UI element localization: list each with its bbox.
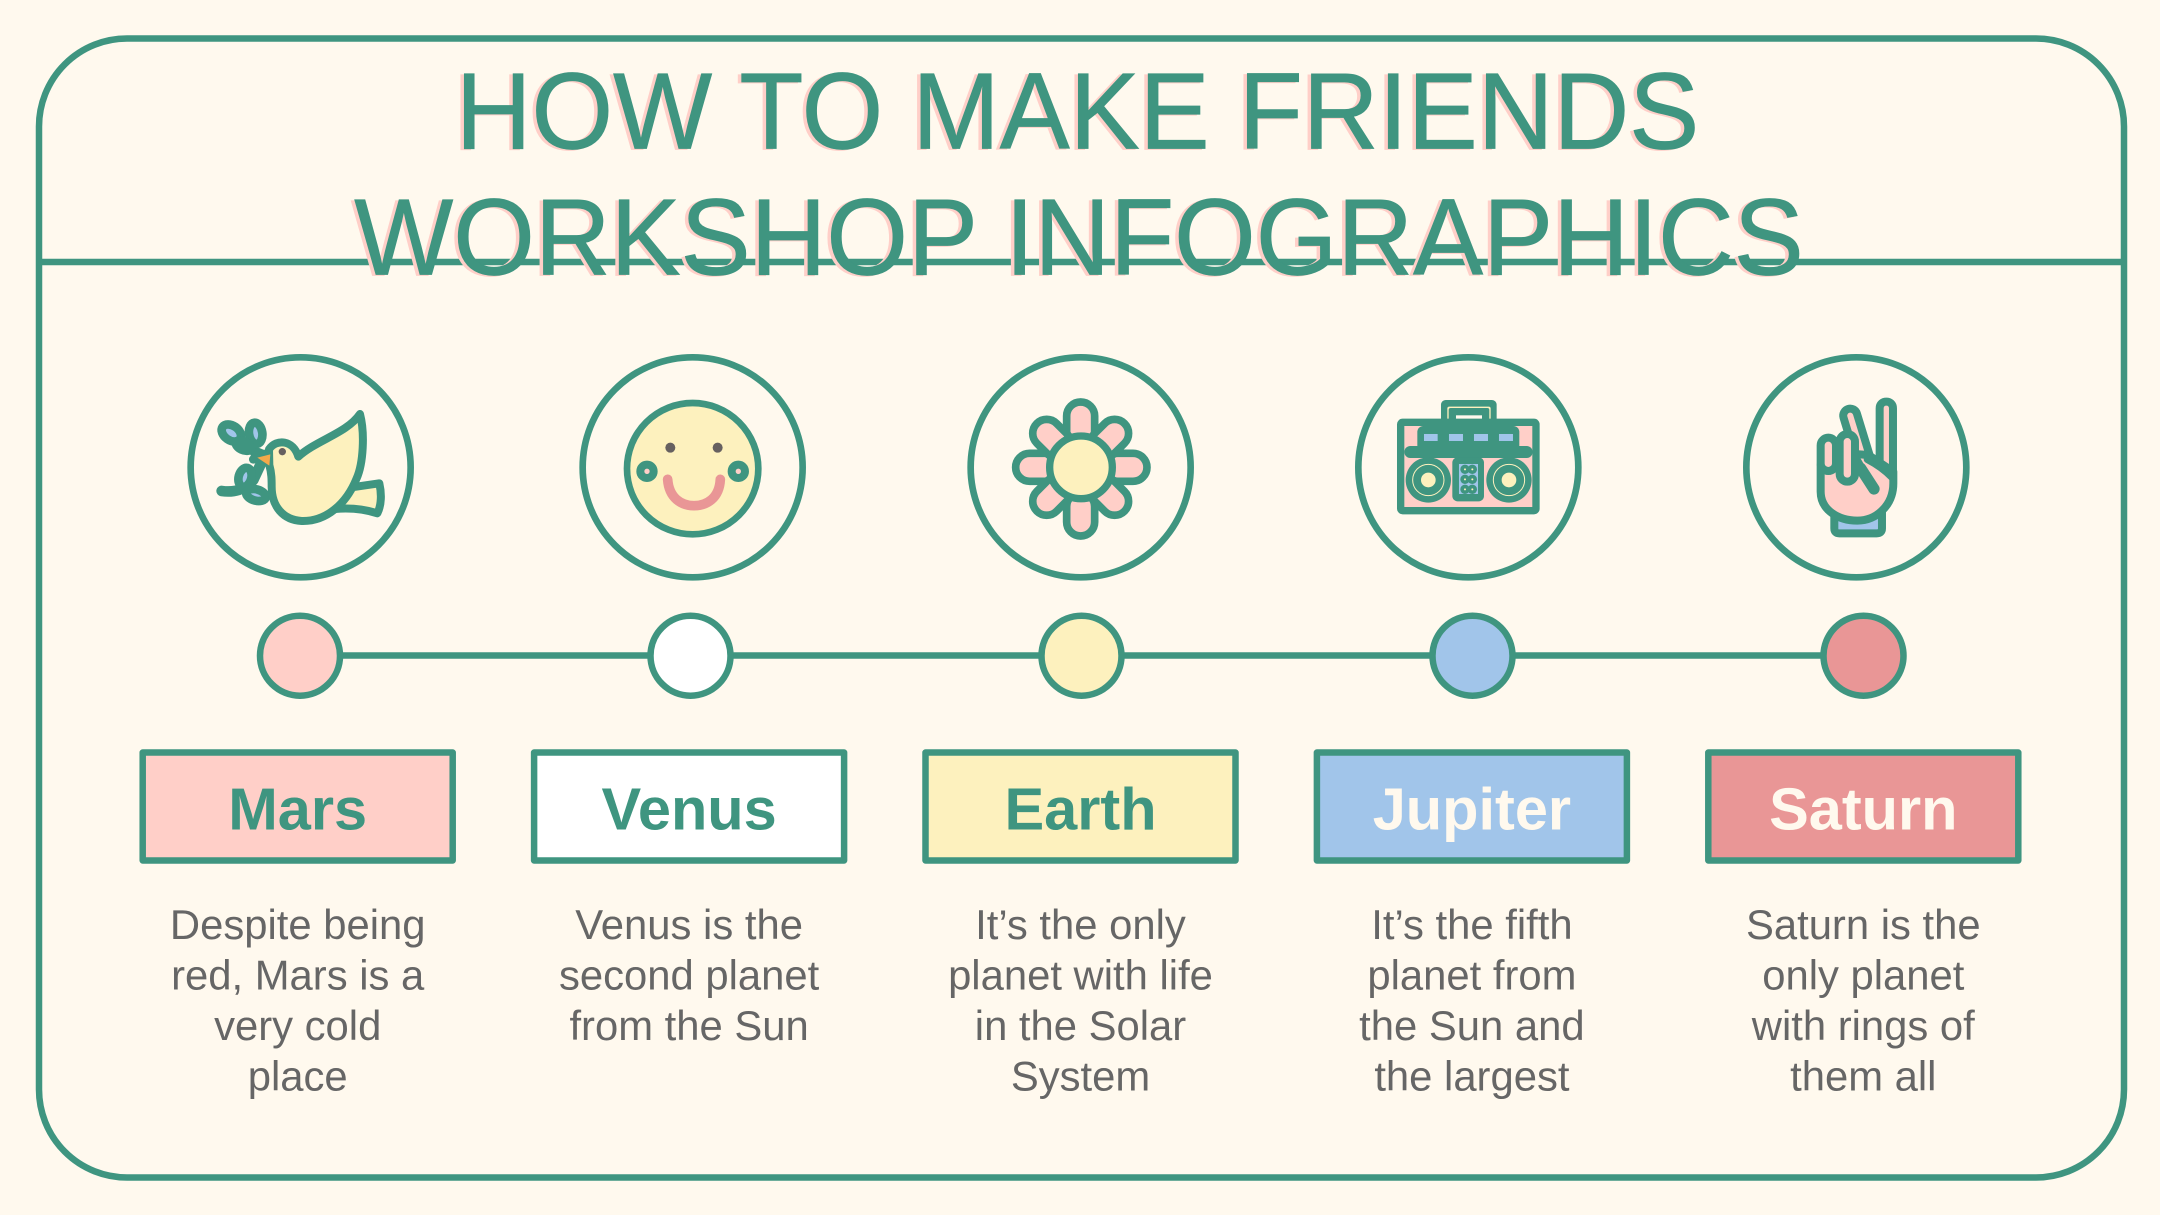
icon: smiling face bbox=[583, 357, 803, 577]
title: WORKSHOP INFOGRAPHICS bbox=[354, 176, 1804, 298]
header divider bbox=[39, 259, 2124, 265]
label: Earth: Earth bbox=[1004, 776, 1157, 842]
description: Mars: very cold bbox=[214, 1002, 381, 1049]
description: Saturn: them all bbox=[1790, 1052, 1936, 1100]
timeline node: Venus bbox=[650, 616, 730, 696]
description: Venus: from the Sun bbox=[569, 1002, 809, 1049]
title: WORKSHOP INFOGRAPHICS bbox=[351, 177, 1800, 299]
description: Venus: second planet bbox=[559, 952, 820, 998]
label: Venus bbox=[534, 752, 844, 860]
label: Saturn: Saturn bbox=[1769, 776, 1958, 842]
description: Earth: in the Solar bbox=[975, 1002, 1186, 1049]
label: Mars: Mars bbox=[228, 776, 367, 842]
description: Earth: planet with life bbox=[948, 952, 1213, 998]
title: HOW TO MAKE FRIENDS bbox=[452, 51, 1696, 173]
description: Venus: Venus is the bbox=[575, 901, 803, 948]
label: Earth bbox=[926, 752, 1236, 860]
description: Jupiter: the Sun and bbox=[1359, 1002, 1585, 1049]
timeline node: Earth bbox=[1042, 616, 1122, 696]
label: Venus: Venus bbox=[601, 776, 777, 842]
timeline node: Saturn bbox=[1824, 616, 1904, 696]
description: Jupiter: It’s the fifth bbox=[1371, 901, 1573, 948]
description: Mars: Despite being bbox=[170, 901, 426, 948]
description: Mars: red, Mars is a bbox=[171, 952, 425, 998]
label: Saturn bbox=[1708, 752, 2018, 860]
description: Saturn: Saturn is the bbox=[1746, 901, 1981, 948]
description: Mars: place bbox=[248, 1052, 348, 1100]
description: Jupiter: the largest bbox=[1374, 1052, 1570, 1100]
label: Jupiter: Jupiter bbox=[1373, 776, 1571, 842]
description: Earth: System bbox=[1011, 1052, 1150, 1100]
label: Mars bbox=[143, 752, 453, 860]
timeline connector bbox=[300, 652, 1863, 659]
title: HOW TO MAKE FRIENDS bbox=[456, 50, 1699, 172]
timeline node: Jupiter bbox=[1432, 616, 1512, 696]
icon: peace hand sign bbox=[1746, 357, 1966, 577]
description: Jupiter: planet from bbox=[1367, 952, 1576, 998]
title bbox=[351, 50, 1804, 299]
icon: boombox bbox=[1358, 357, 1578, 577]
description: Saturn: only planet bbox=[1762, 952, 1965, 998]
description: Saturn: with rings of bbox=[1751, 1002, 1975, 1049]
icon: flower bbox=[971, 357, 1191, 577]
description: Earth: It’s the only bbox=[975, 901, 1186, 948]
label: Jupiter bbox=[1317, 752, 1627, 860]
timeline node: Mars bbox=[260, 616, 340, 696]
icon: dove with olive branch bbox=[191, 357, 411, 577]
